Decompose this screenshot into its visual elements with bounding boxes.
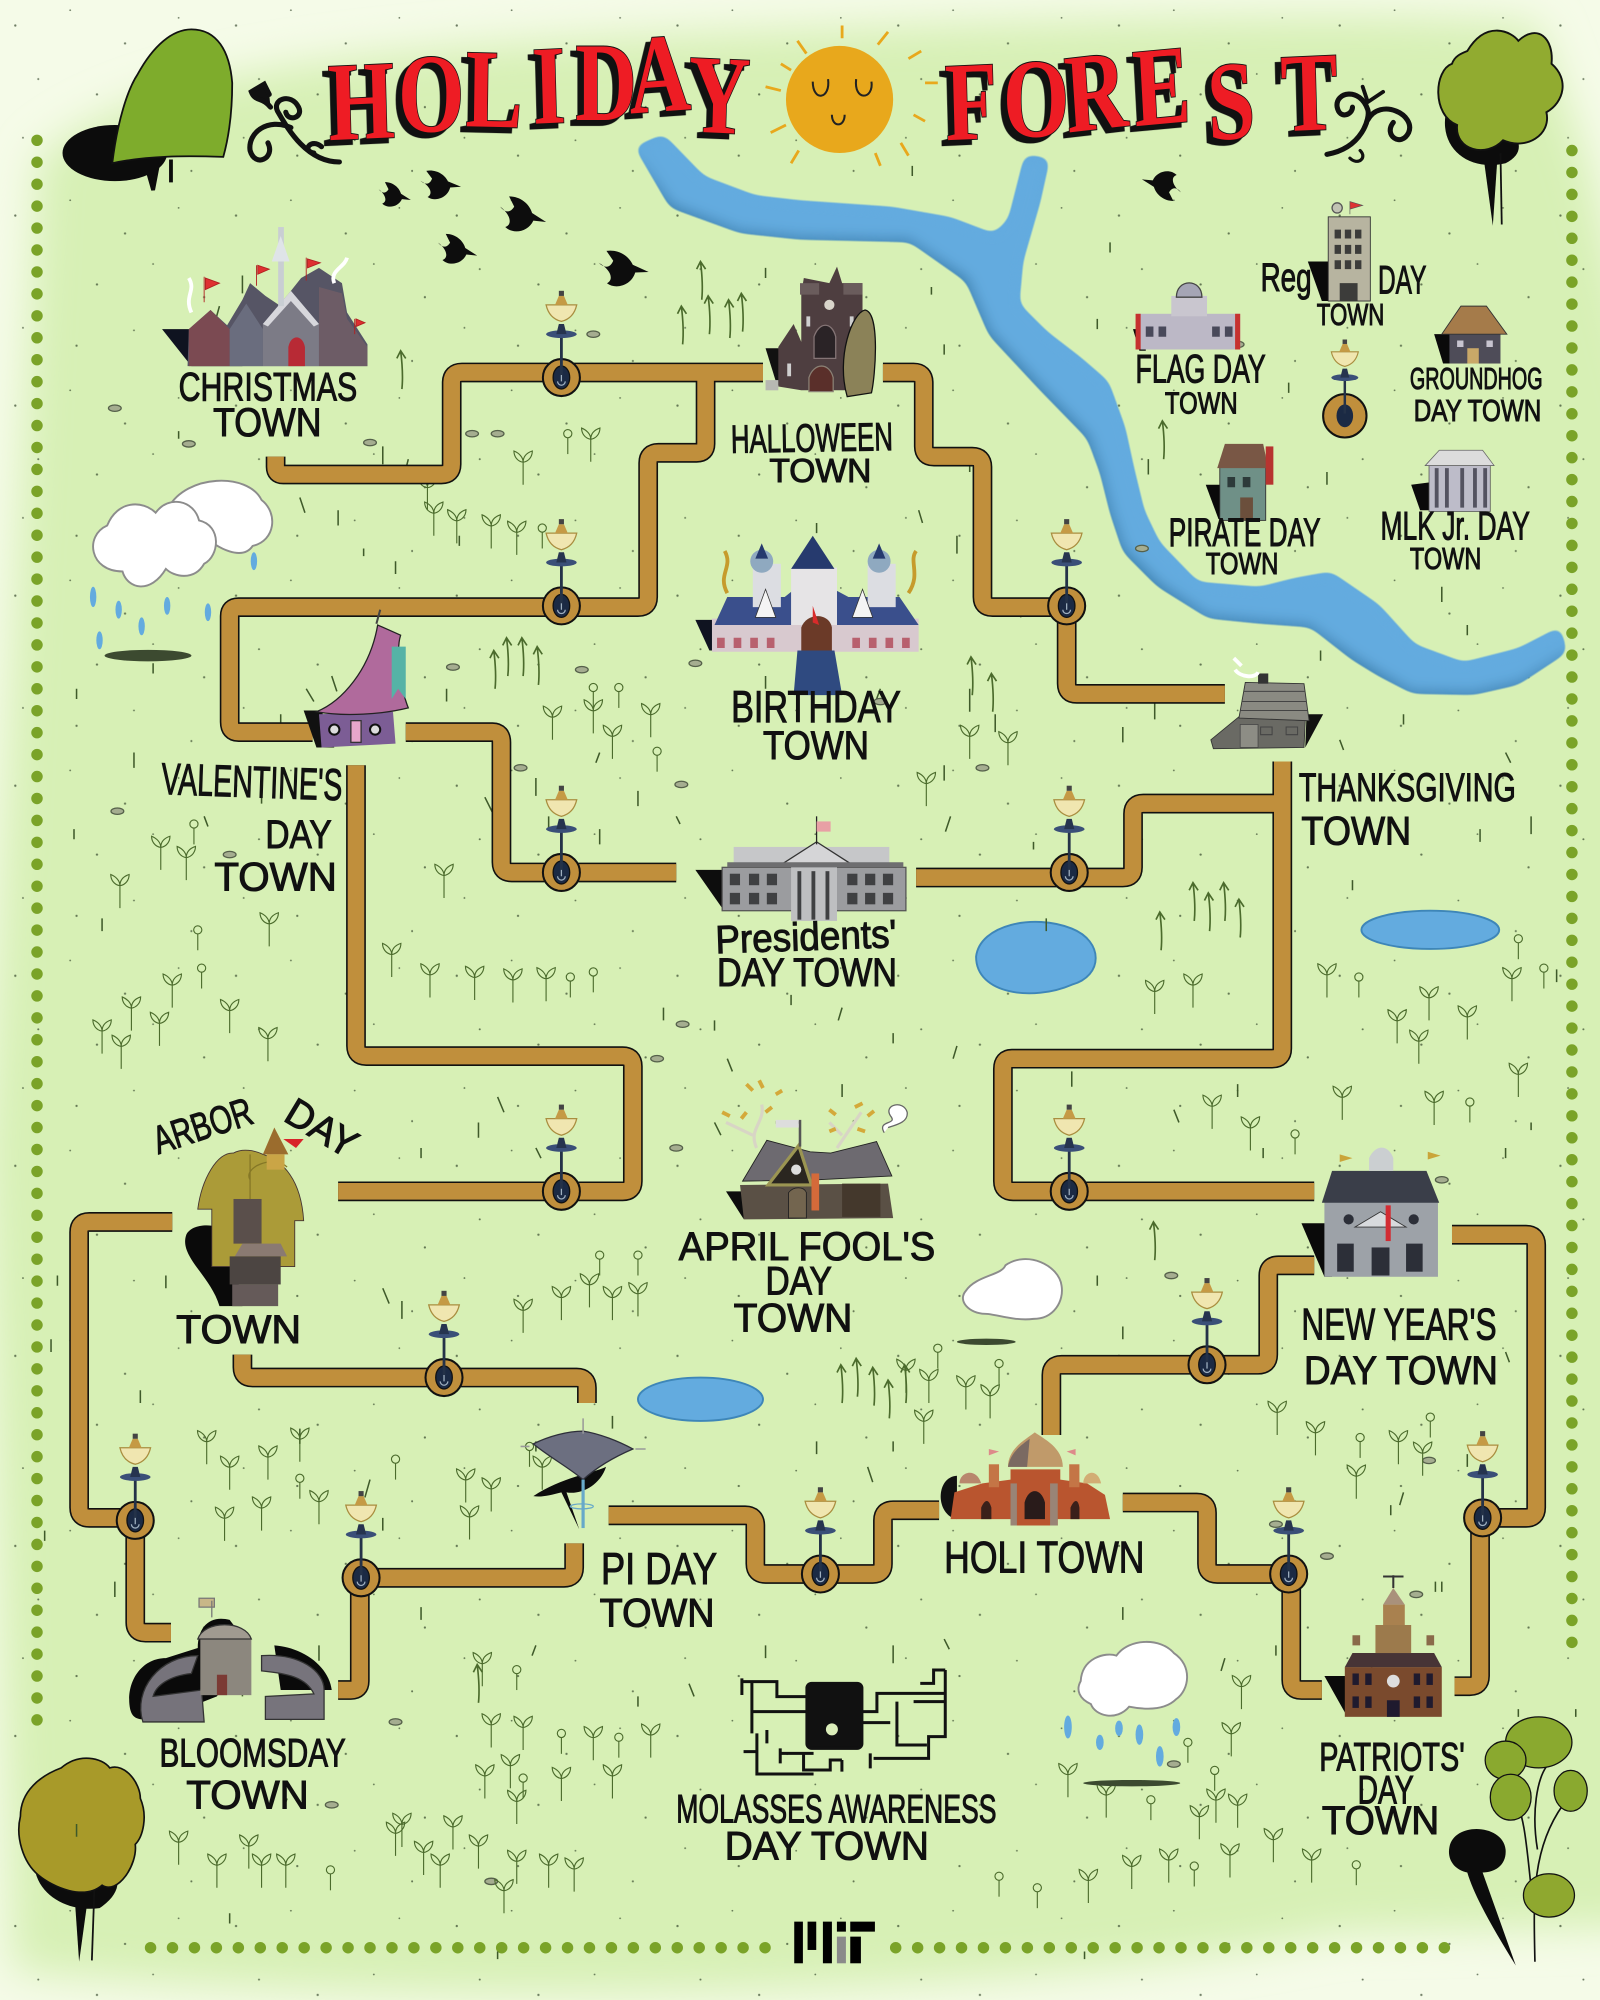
tree: top left green arch [63, 29, 232, 190]
title: Holiday: HOLIDAY [327, 9, 752, 165]
label: Patriots' town [1319, 1735, 1465, 1843]
label: Birthday town: TOWN [763, 724, 869, 768]
lamps and disks [117, 291, 1501, 1596]
label: Flag day town: FLAG DAY [1136, 348, 1266, 392]
building: Flag day town [1133, 283, 1240, 351]
label: Pirate town [1169, 511, 1321, 581]
label: Patriots' town: PATRIOTS' [1319, 1735, 1465, 1779]
label: Halloween town [730, 415, 893, 490]
label: Pi day town [600, 1545, 717, 1635]
label: Patriots' town: TOWN [1322, 1799, 1439, 1843]
tree: bottom left olive [19, 1758, 144, 1962]
tree: top right round [1438, 31, 1563, 226]
label: Bloomsday town [159, 1732, 346, 1818]
road network [79, 372, 1536, 1690]
clouds and rain [90, 481, 1187, 1786]
label: Valentine's town: DAY [265, 813, 332, 857]
building: Holi town [941, 1432, 1110, 1526]
label: Molasses town [676, 1788, 996, 1869]
label: Flag day town [1136, 348, 1266, 420]
label: Flag day town: TOWN [1165, 386, 1238, 420]
building: April Fool's town [722, 1080, 907, 1219]
label: April Fool's town [679, 1225, 935, 1341]
label: Christmas town: TOWN [213, 401, 322, 445]
building: Arbor day town [185, 1128, 304, 1306]
building: Pirate town [1206, 444, 1273, 520]
building: Halloween town [766, 267, 875, 397]
label: Presidents' town: DAY TOWN [717, 951, 897, 995]
label: Presidents' town: Presidents' [715, 912, 897, 962]
building: Groundhog town [1434, 306, 1507, 364]
seedlings [93, 428, 1548, 1913]
label: Groundhog town: DAY TOWN [1414, 394, 1541, 428]
label: New Year's town [1301, 1300, 1498, 1393]
label: Pi day town: PI DAY [601, 1545, 717, 1594]
building: New Year's town [1301, 1148, 1441, 1277]
building: Thanksgiving town [1211, 658, 1323, 749]
label: Molasses town: DAY TOWN [725, 1825, 929, 1869]
label: Groundhog town [1410, 362, 1543, 428]
label: Presidents' town [715, 912, 897, 995]
label: New Year's town: NEW YEAR'S [1301, 1300, 1497, 1349]
label: Pirate town: TOWN [1206, 547, 1278, 581]
label: Thanksgiving town [1299, 766, 1516, 853]
river [634, 134, 1567, 695]
label: Bloomsday town: BLOOMSDAY [159, 1732, 346, 1776]
building: Patriots' town [1324, 1575, 1442, 1717]
building: MLK town [1411, 450, 1494, 511]
building: Bloomsday town [129, 1598, 332, 1722]
label: Birthday town: BIRTHDAY [731, 683, 901, 732]
label: Valentine's town: TOWN [214, 855, 337, 899]
title: Forest: FOREST [943, 21, 1339, 165]
label: MLK town [1381, 505, 1530, 576]
label: Molasses town: MOLASSES AWARENESS [676, 1788, 996, 1832]
label: Arbor day town: ARBOR [147, 1090, 258, 1163]
swirl left [250, 84, 339, 162]
building: Birthday town [695, 536, 919, 695]
label: New Year's town: DAY TOWN [1304, 1349, 1498, 1393]
MIT logo [794, 1922, 875, 1963]
label: Arbor day town: TOWN [176, 1308, 301, 1352]
label: Holi town: HOLI TOWN [944, 1534, 1144, 1583]
label: Pirate town: PIRATE DAY [1169, 511, 1321, 555]
label: April Fool's town: DAY [766, 1260, 832, 1304]
label: Reg day town: Reg [1261, 256, 1312, 300]
label: Patriots' town: DAY [1358, 1769, 1414, 1813]
label: Bloomsday town: TOWN [186, 1774, 309, 1818]
label: Christmas town [179, 366, 357, 445]
label: Valentine's town [160, 755, 343, 899]
label: MLK town: MLK Jr. DAY [1381, 505, 1530, 549]
building: Reg day town [1308, 202, 1370, 301]
label: Halloween town: TOWN [769, 453, 871, 490]
label: Christmas town: CHRISTMAS [179, 366, 357, 410]
building: Molasses town pipes [742, 1670, 945, 1774]
label: April Fool's town: TOWN [734, 1297, 852, 1341]
grass tufts [397, 261, 1244, 1703]
label: Reg day town [1261, 256, 1426, 332]
label: Thanksgiving town: TOWN [1301, 809, 1411, 853]
building: Pi day town [521, 1418, 646, 1529]
ponds [638, 911, 1499, 1421]
label: Reg day town: TOWN [1317, 298, 1384, 332]
label: Birthday town [731, 683, 901, 768]
label: Reg day town: DAY [1378, 258, 1426, 302]
label: Halloween town: HALLOWEEN [730, 415, 893, 462]
pebbles [108, 331, 1448, 1885]
birds [379, 165, 1181, 289]
label: Pi day town: TOWN [600, 1591, 715, 1635]
building: Presidents' town [695, 816, 906, 921]
label: Arbor day town: DAY [277, 1090, 366, 1167]
sun [766, 26, 938, 166]
label: Valentine's town: VALENTINE'S [160, 755, 343, 810]
label: Arbor day town [147, 1090, 366, 1352]
label: Thanksgiving town: THANKSGIVING [1299, 766, 1516, 810]
label: MLK town: TOWN [1410, 542, 1481, 576]
swirl right [1327, 87, 1410, 161]
building: Christmas town [162, 227, 367, 366]
label: April Fool's town: APRIL FOOL'S [679, 1225, 935, 1269]
tree: bottom right cluster [1449, 1717, 1587, 1966]
building: Valentine's town [304, 610, 408, 747]
